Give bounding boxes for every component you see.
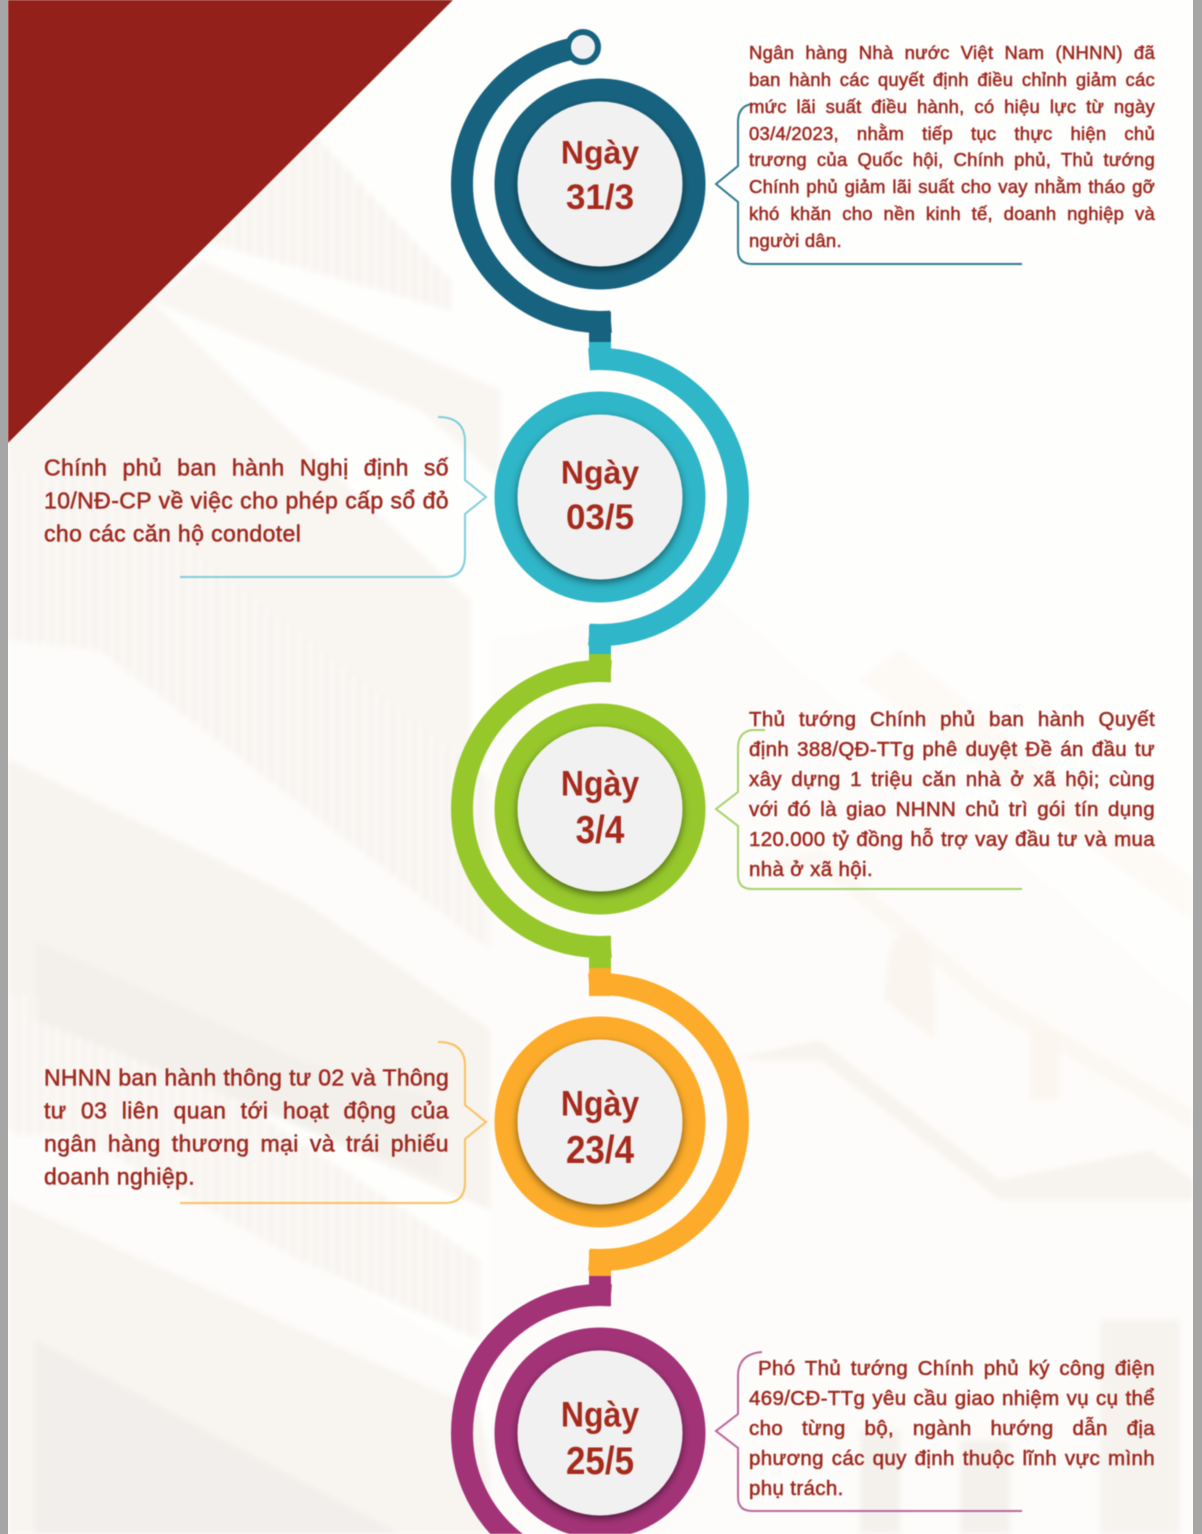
- text block: 23/4 circulars: NHNN ban hành thông tư 02 và Thông: [44, 1064, 449, 1090]
- text block: 03/5 decree on condotel: [44, 454, 449, 546]
- step 1: callout bracket: [716, 104, 1022, 264]
- step 3: ring: [494, 704, 706, 914]
- step 4: orange arc and connector: [589, 968, 738, 1276]
- step 5: purple arc and connector: [462, 1276, 611, 1534]
- text block: 23/4 circulars: doanh nghiệp.: [44, 1164, 195, 1190]
- text block: 3/4 social housing decision: Thủ tướng Chính phủ ban hành Quyết: [749, 708, 1155, 731]
- text block: 03/5 decree on condotel: 10/NĐ-CP về việc cho phép cấp sổ đỏ: [44, 488, 449, 514]
- step 4: callout bracket: [180, 1042, 486, 1203]
- step 2: callout bracket: [180, 417, 486, 577]
- date label: Ngày 23/4: Ngày: [561, 1084, 639, 1123]
- date label: Ngày 23/4: 23/4: [566, 1129, 634, 1172]
- date label: Ngày 3/4: 3/4: [576, 809, 624, 852]
- text block: 03/5 decree on condotel: Chính phủ ban hành Nghị định số: [44, 454, 449, 480]
- date label: Ngày 31/3: [561, 134, 640, 217]
- step 1: ring: [494, 78, 706, 290]
- step 1: dark teal arc and connector: [462, 47, 611, 342]
- date label: Ngày 3/4: Ngày: [561, 764, 639, 803]
- text block: 03/5 decree on condotel: cho các căn hộ condotel: [44, 520, 301, 546]
- text block: 31/3 interest rate decision: Chính phủ giảm lãi suất cho vay nhằm tháo gỡ: [749, 176, 1155, 197]
- date label: Ngày 03/5: [561, 454, 640, 537]
- text block: 31/3 interest rate decision: ban hành các quyết định điều chỉnh giảm các: [749, 69, 1155, 90]
- date label: Ngày 25/5: 25/5: [566, 1440, 634, 1483]
- step 3: green arc and connector: [462, 654, 611, 968]
- text block: 25/5 official dispatch: phụ trách.: [749, 1477, 844, 1500]
- date label: Ngày 31/3: 31/3: [566, 178, 634, 217]
- text block: 31/3 interest rate decision: [748, 42, 1156, 252]
- text block: 31/3 interest rate decision: khó khăn cho nền kinh tế, doanh nghiệp và: [749, 203, 1155, 224]
- step 4: ring: [494, 1016, 706, 1228]
- text block: 25/5 official dispatch: 469/CĐ-TTg yêu cầu giao nhiệm vụ cụ thể: [749, 1387, 1155, 1410]
- date label: Ngày 03/5: Ngày: [561, 454, 639, 490]
- date label: Ngày 23/4: [561, 1084, 640, 1172]
- left page edge: [0, 0, 8, 1534]
- date label: Ngày 25/5: [561, 1395, 640, 1483]
- text block: 3/4 social housing decision: xây dựng 1 triệu căn nhà ở xã hội; cùng: [749, 768, 1155, 791]
- text block: 3/4 social housing decision: định 388/QĐ-TTg phê duyệt Đề án đầu tư: [749, 738, 1155, 761]
- text block: 31/3 interest rate decision: người dân.: [749, 230, 842, 251]
- date label: Ngày 03/5: 03/5: [566, 498, 634, 537]
- text block: 3/4 social housing decision: nhà ở xã hội.: [749, 858, 873, 881]
- right page edge: [1193, 0, 1202, 1534]
- text block: 31/3 interest rate decision: Ngân hàng Nhà nước Việt Nam (NHNN) đã: [749, 42, 1155, 63]
- text block: 3/4 social housing decision: 120.000 tỷ đồng hỗ trợ vay đầu tư và mua: [749, 828, 1155, 851]
- text block: 3/4 social housing decision: [748, 708, 1156, 881]
- step 2: ring: [494, 392, 706, 602]
- step 1: start knob: [568, 32, 598, 62]
- text block: 25/5 official dispatch: cho từng bộ, ngành hướng dẫn địa: [749, 1417, 1155, 1440]
- text block: 23/4 circulars: [43, 1064, 450, 1191]
- text block: 31/3 interest rate decision: mức lãi suất điều hành, có hiệu lực từ ngày: [749, 96, 1155, 117]
- step 3: callout bracket: [716, 730, 1022, 889]
- text block: 31/3 interest rate decision: trương của Quốc hội, Chính phủ, Thủ tướng: [749, 149, 1155, 170]
- date label: Ngày 25/5: Ngày: [561, 1395, 639, 1434]
- step 5: callout bracket: [716, 1352, 1022, 1511]
- text block: 25/5 official dispatch: [748, 1357, 1156, 1500]
- text block: 3/4 social housing decision: với đó là giao NHNN chủ trì gói tín dụng: [749, 798, 1155, 821]
- date label: Ngày 3/4: [561, 764, 640, 852]
- text block: 25/5 official dispatch: Phó Thủ tướng Chính phủ ký công điện: [758, 1357, 1155, 1380]
- text block: 23/4 circulars: ngân hàng thương mại và trái phiếu: [44, 1130, 449, 1156]
- text block: 23/4 circulars: tư 03 liên quan tới hoạt động của: [44, 1098, 449, 1124]
- date label: Ngày 31/3: Ngày: [561, 134, 639, 170]
- step 5: ring: [494, 1328, 706, 1534]
- step 2: teal arc and connector: [589, 342, 738, 654]
- text block: 25/5 official dispatch: phương các quy định thuộc lĩnh vực mình: [749, 1447, 1155, 1470]
- text block: 31/3 interest rate decision: 03/4/2023, nhằm tiếp tục thực hiện chủ: [749, 123, 1155, 144]
